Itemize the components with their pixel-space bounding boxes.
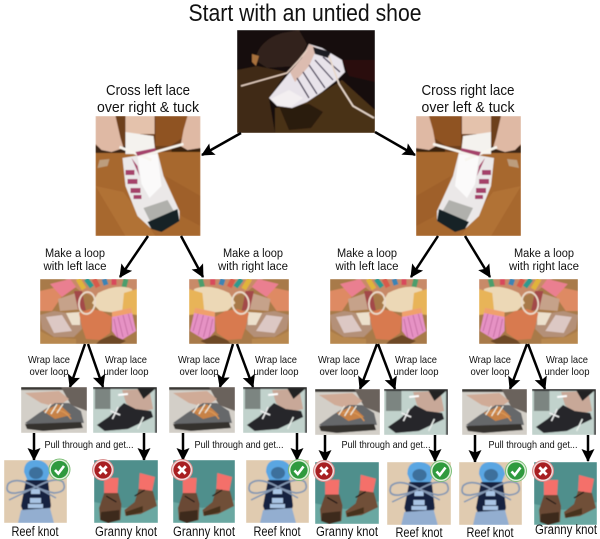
loop labels: Make a loop xyxy=(514,248,574,260)
photo: cross left lace xyxy=(96,116,200,236)
wrap labels: Wrap lace xyxy=(28,354,70,366)
knot name labels: Granny knot xyxy=(95,524,157,539)
level 2 right branch heading: Cross right lace xyxy=(422,83,514,99)
loop labels: Make a loop xyxy=(337,248,397,260)
loop labels: with right lace xyxy=(508,261,579,273)
wrap labels: Wrap lace xyxy=(546,354,588,366)
loop labels: with right lace xyxy=(217,261,288,273)
loop labels: with left lace xyxy=(335,261,398,273)
wrap labels: under loop xyxy=(254,366,299,378)
photo: untied shoe xyxy=(237,30,375,133)
level 2 right branch heading: over left & tuck xyxy=(422,100,515,116)
knot name labels xyxy=(12,522,597,539)
loop labels: Make a loop xyxy=(223,248,283,260)
arrows: from untied shoe xyxy=(202,132,415,155)
wrap labels: under loop xyxy=(544,366,590,378)
pull through labels: Pull through and get... xyxy=(44,439,134,451)
pull through labels xyxy=(44,439,578,451)
wrap labels: over loop xyxy=(470,366,510,378)
wrap labels: Wrap lace xyxy=(318,354,360,366)
loop labels: Make a loop xyxy=(45,248,105,260)
loop labels: with left lace xyxy=(43,261,106,273)
icons: check and cross badges xyxy=(49,459,554,482)
wrap labels: Wrap lace xyxy=(105,354,147,366)
wrap labels: under loop xyxy=(394,366,439,378)
pull through labels: Pull through and get... xyxy=(342,439,430,451)
wrap labels: over loop xyxy=(30,366,69,378)
wrap labels: over loop xyxy=(320,366,359,378)
pull through labels: Pull through and get... xyxy=(488,439,578,451)
level 2 left branch heading xyxy=(97,83,200,116)
wrap labels: Wrap lace xyxy=(255,354,297,366)
wrap labels: Wrap lace xyxy=(469,354,511,366)
knot name labels: Reef knot xyxy=(12,524,59,539)
knot name labels: Granny knot xyxy=(316,524,378,539)
arrows: from wraps to knots xyxy=(34,433,588,462)
wrap labels: Wrap lace xyxy=(178,354,220,366)
photos: wrapping the lace xyxy=(21,387,596,435)
level 2 right branch heading xyxy=(422,83,515,116)
loop labels xyxy=(43,248,579,273)
knot name labels: Reef knot xyxy=(254,524,301,539)
wrap labels: under loop xyxy=(104,366,149,378)
photo: cross right lace xyxy=(416,116,521,236)
title: Start with an untied shoe xyxy=(188,0,422,27)
photos: finished knots xyxy=(4,460,597,525)
photos: make a loop xyxy=(40,279,578,344)
pull through labels: Pull through and get... xyxy=(194,439,284,451)
wrap labels xyxy=(28,354,590,378)
level 2 left branch heading: over right & tuck xyxy=(97,100,200,116)
wrap labels: Wrap lace xyxy=(395,354,437,366)
arrows: from loops to wraps xyxy=(70,344,545,389)
arrows: from cross photos to loops xyxy=(120,236,490,277)
level 2 left branch heading: Cross left lace xyxy=(106,83,190,99)
knot name labels: Granny knot xyxy=(173,524,235,539)
wrap labels: over loop xyxy=(180,366,219,378)
